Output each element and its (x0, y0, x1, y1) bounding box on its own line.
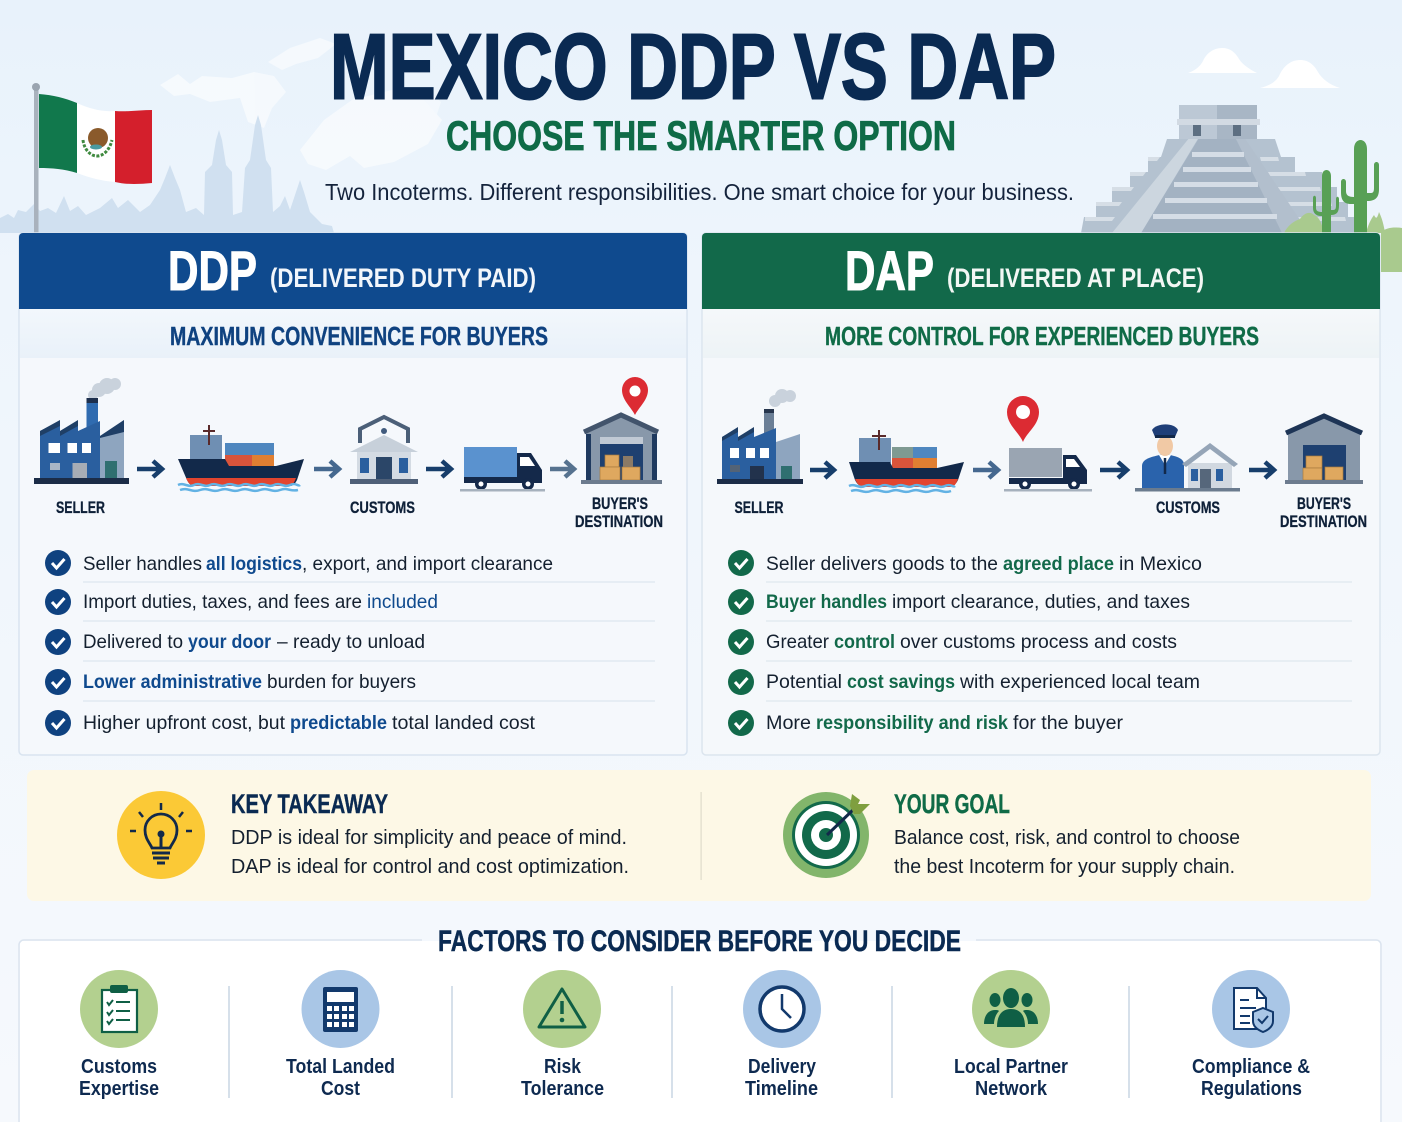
arrow (1100, 462, 1127, 478)
factor: compliance and regulations: Compliance & (1192, 1055, 1310, 1078)
factors heading: FACTORS TO CONSIDER BEFORE YOU DECIDE (438, 925, 961, 958)
factor: local partner network: Network (975, 1077, 1048, 1100)
DAP header band (702, 233, 1380, 309)
DDP header band (19, 233, 687, 309)
arrow (426, 461, 451, 477)
DDP full name: (DELIVERED DUTY PAID) (270, 263, 536, 293)
factor: total landed cost (286, 970, 395, 1100)
your goal heading: YOUR GOAL (894, 789, 1010, 819)
DDP list item 2 (45, 589, 438, 615)
subtitle: CHOOSE THE SMARTER OPTION (446, 112, 956, 159)
DDP list item 4: burden for buyers (267, 671, 416, 693)
factor: risk tolerance (521, 970, 604, 1100)
DDP list item 3: Delivered to (83, 631, 183, 653)
DDP flow: delivery truck (460, 447, 545, 492)
DAP list item 5: for the buyer (1013, 712, 1124, 734)
factor: local partner network: Local Partner (954, 1055, 1068, 1078)
panel: takeaway band (27, 770, 1371, 901)
city skyline silhouette (0, 115, 334, 233)
key takeaway text: DAP is ideal for control and cost optimization. (231, 855, 629, 878)
factor: compliance and regulations: Regulations (1201, 1077, 1302, 1100)
DAP list item 5 (728, 710, 1124, 736)
DDP list item 3: your door (188, 631, 271, 653)
factor: delivery timeline: Delivery (748, 1055, 817, 1078)
DAP list item 3: Greater (766, 631, 829, 653)
illustration: Mexican flag (32, 83, 152, 234)
DDP flow: customs building (350, 417, 418, 484)
DDP subheading: MAXIMUM CONVENIENCE FOR BUYERS (170, 323, 548, 351)
factor: customs expertise (79, 970, 159, 1100)
DAP list item 3 (728, 629, 1177, 655)
DAP full name: (DELIVERED AT PLACE) (947, 263, 1204, 293)
factor: compliance and regulations (1192, 970, 1310, 1100)
DAP list item 5: responsibility and risk (816, 712, 1008, 734)
DDP list item 4: Lower administrative (83, 671, 262, 693)
DAP flow: customs officer and building (1135, 424, 1240, 492)
DAP flow: seller factory (717, 389, 803, 484)
factor: delivery timeline: Timeline (745, 1077, 818, 1100)
DAP flow: truck with location pin (1004, 396, 1092, 492)
DDP list item 1 (45, 550, 553, 576)
title: MEXICO DDP VS DAP (330, 14, 1056, 118)
DDP list item 2: included (367, 591, 438, 613)
arrow (137, 461, 162, 477)
DAP list item 3: control (834, 631, 895, 653)
flow label: buyer's destination: BUYER'S (592, 494, 648, 513)
factor: delivery timeline (743, 970, 821, 1100)
DAP list item 1: Seller delivers goods to the (766, 553, 998, 575)
your goal text (894, 826, 1240, 878)
DAP subheading: MORE CONTROL FOR EXPERIENCED BUYERS (825, 323, 1259, 351)
your goal text: Balance cost, risk, and control to choose (894, 826, 1240, 849)
factor: local partner network (954, 970, 1068, 1100)
DAP flow: buyer warehouse (1285, 416, 1363, 484)
flow label: buyer's destination (1280, 494, 1367, 531)
flow label: seller: SELLER (56, 498, 105, 517)
DAP list item 3: over customs process and costs (900, 631, 1177, 653)
DDP flow: seller factory (34, 378, 129, 484)
DDP list item 5: Higher upfront cost, but (83, 712, 286, 734)
key takeaway text (231, 826, 629, 878)
DAP list item 4: cost savings (847, 671, 955, 693)
arrow (314, 461, 339, 477)
DAP list item 4: Potential (766, 671, 842, 693)
flow label: seller: SELLER (734, 498, 784, 517)
DDP list row dividers (83, 582, 655, 701)
DAP subheader band (703, 309, 1379, 358)
DAP list item 4 (728, 669, 1200, 695)
DAP list item 4: with experienced local team (959, 671, 1200, 693)
factor: customs expertise: Customs (81, 1055, 157, 1078)
panel: DDP (19, 233, 687, 755)
DAP list item 2: import clearance, duties, and taxes (892, 591, 1190, 613)
flow label: buyer's destination: DESTINATION (575, 512, 663, 531)
faint world map backdrop (160, 38, 442, 170)
DDP list item 2: Import duties, taxes, and fees are (83, 591, 362, 613)
factor: total landed cost: Total Landed (286, 1055, 395, 1078)
factor: risk tolerance: Risk (544, 1055, 582, 1078)
DDP list item 4 (45, 669, 416, 695)
icon: target with arrow (783, 792, 870, 878)
DDP list item 1: , export, and import clearance (302, 553, 553, 575)
DDP list item 1: Seller handles (83, 553, 202, 575)
DAP list item 2 (728, 589, 1190, 615)
arrow (1249, 462, 1274, 478)
factor: risk tolerance: Tolerance (521, 1077, 604, 1100)
flow label: buyer's destination (575, 494, 663, 531)
factor: total landed cost: Cost (321, 1077, 360, 1100)
DDP list item 5: predictable (290, 712, 387, 734)
DDP heading: DDP (168, 239, 257, 302)
illustration: Mayan pyramid (1081, 105, 1369, 233)
flow label: buyer's destination: BUYER'S (1297, 494, 1351, 513)
DAP list row dividers (766, 582, 1352, 701)
flow label: customs: CUSTOMS (350, 498, 415, 517)
illustration: cacti and green hill (1284, 140, 1402, 272)
DDP list item 3 (45, 629, 425, 655)
panel: DAP (702, 233, 1380, 755)
DAP list item 1: in Mexico (1119, 553, 1202, 575)
arrow (973, 462, 998, 478)
DDP list item 3: – ready to unload (277, 631, 425, 653)
flow label: customs: CUSTOMS (1156, 498, 1220, 517)
DDP list item 1: all logistics (206, 553, 302, 575)
DDP list item 5: total landed cost (392, 712, 536, 734)
DAP heading: DAP (845, 239, 934, 302)
tagline: Two Incoterms. Different responsibilities. One smart choice for your business. (325, 179, 1074, 205)
your goal text: the best Incoterm for your supply chain. (894, 855, 1235, 878)
key takeaway text: DDP is ideal for simplicity and peace of mind. (231, 826, 627, 849)
DDP subheader band (20, 309, 686, 358)
DAP list item 2: Buyer handles (766, 591, 887, 613)
DDP flow: buyer warehouse with pin (581, 377, 662, 484)
DDP flow: cargo ship (178, 425, 304, 491)
clouds (1188, 48, 1340, 88)
arrow (550, 461, 574, 477)
flow label: buyer's destination: DESTINATION (1280, 512, 1367, 531)
DAP list item 1: agreed place (1003, 553, 1114, 575)
key takeaway heading: KEY TAKEAWAY (231, 789, 388, 819)
DAP list item 1 (728, 550, 1202, 576)
DDP list item 5 (45, 710, 536, 736)
arrow (810, 462, 834, 478)
DAP list item 5: More (766, 712, 811, 734)
panel: factors to consider (19, 925, 1381, 1122)
DAP flow: cargo ship (849, 430, 964, 492)
icon: light bulb (117, 791, 205, 879)
factor: customs expertise: Expertise (79, 1077, 159, 1100)
